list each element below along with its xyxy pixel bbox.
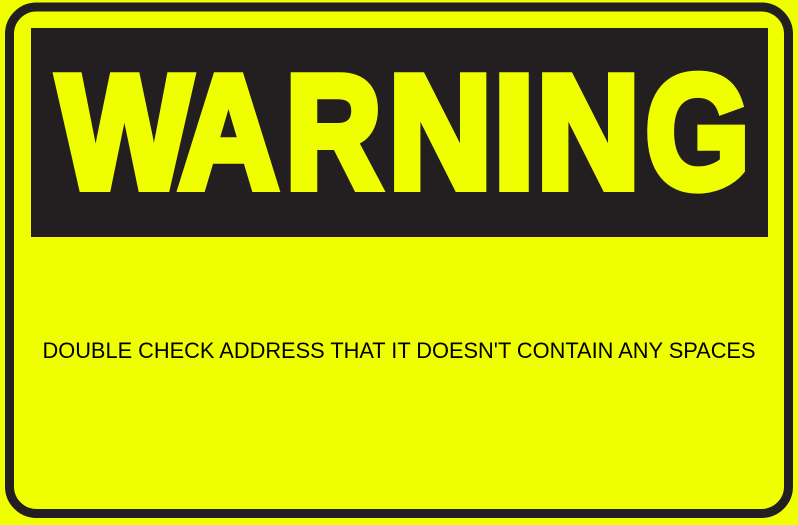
heading: WARNING: W [58, 42, 192, 222]
heading: WARNING: G [646, 42, 750, 222]
heading: WARNING: N [388, 42, 492, 222]
message text: DOUBLE CHECK ADDRESS THAT IT DOESN'T CONTAIN ANY SPACES [42, 338, 756, 363]
heading: WARNING: R [286, 42, 382, 222]
heading: WARNING: I [494, 42, 534, 222]
heading: WARNING: A [178, 42, 278, 222]
heading: WARNING: N [536, 42, 640, 222]
heading banner [31, 28, 768, 237]
heading: WARNING [58, 42, 750, 222]
